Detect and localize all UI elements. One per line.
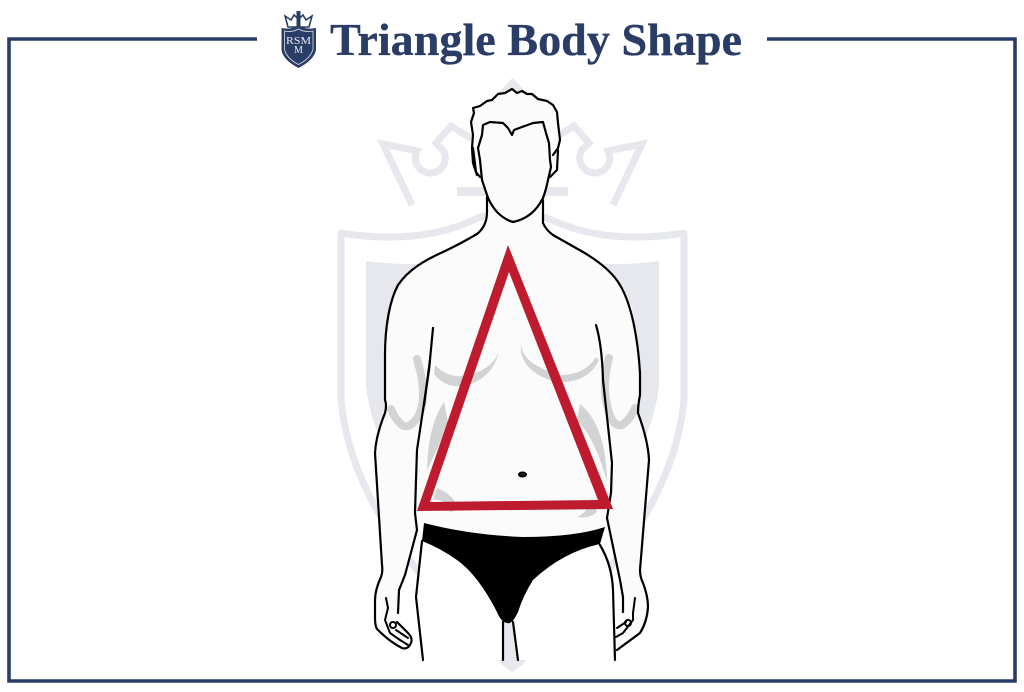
figure: man in black briefs — [375, 89, 649, 678]
title: Triangle Body Shape — [330, 14, 742, 65]
briefs — [422, 523, 605, 623]
body outlines — [375, 89, 649, 660]
leg fill — [416, 541, 615, 678]
muscle shading — [427, 343, 607, 517]
hands and navel — [385, 472, 635, 645]
red triangle — [417, 245, 613, 511]
watermark: shield and crown — [341, 78, 684, 668]
strip and tip between the legs — [500, 622, 525, 672]
body fill — [375, 197, 649, 650]
logo: shield crest: RSM — [286, 36, 311, 47]
logo: shield crest: M — [294, 45, 303, 56]
logo: shield crest — [282, 11, 316, 68]
